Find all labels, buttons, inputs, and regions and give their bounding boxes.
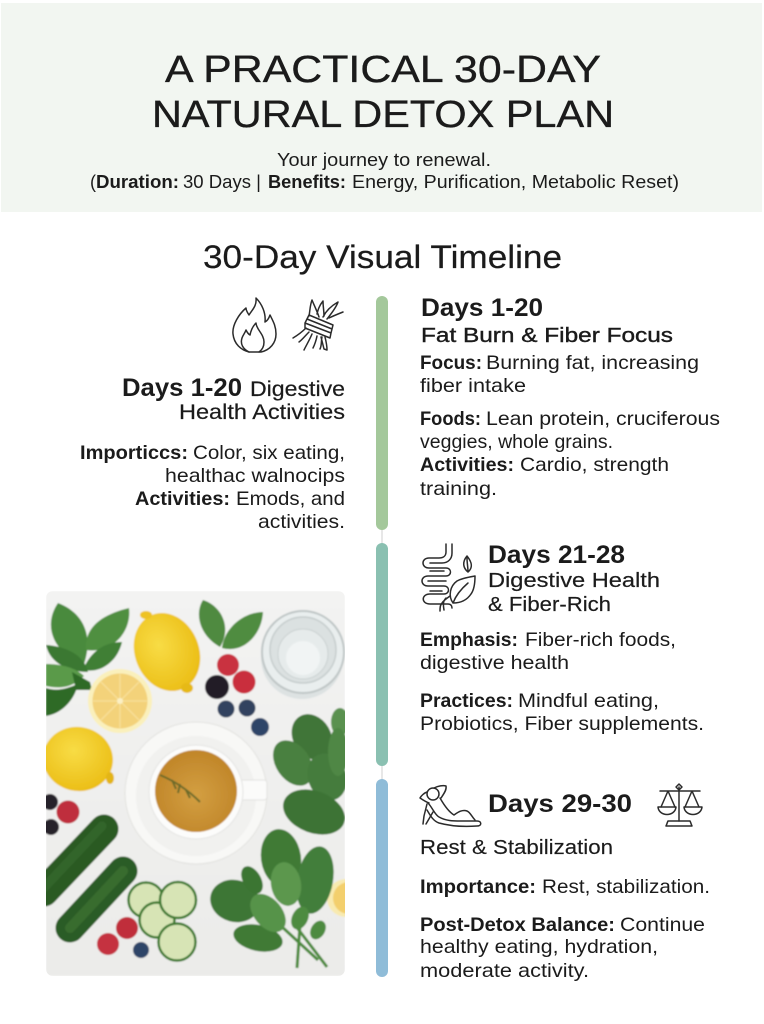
subtitle: 30 Days | xyxy=(183,172,261,192)
body days 21-28: Practices: xyxy=(420,690,513,712)
panel: right days 1-20 xyxy=(420,294,720,500)
tea xyxy=(155,750,237,832)
heading days 21-28 xyxy=(488,541,660,616)
left body text: activities. xyxy=(258,511,345,533)
subtitle: Duration: xyxy=(96,172,179,192)
icon: flame xyxy=(233,298,276,352)
left body text: Color, six eating, xyxy=(193,442,345,464)
body days 21-28: Fiber-rich foods, xyxy=(525,629,676,651)
body days 1-20: Activities: xyxy=(420,454,514,476)
body days 29-30: moderate activity. xyxy=(420,960,589,982)
body days 29-30: Importance: xyxy=(420,876,536,898)
subheading rest and stabilization: Rest & Stabilization xyxy=(420,836,613,859)
left body text: Emods, and xyxy=(236,488,345,510)
heading days 21-28: Digestive Health xyxy=(488,569,660,592)
body days 29-30: Rest, stabilization. xyxy=(542,876,710,898)
heading days 1-20: Fat Burn & Fiber Focus xyxy=(421,324,673,347)
berries lower xyxy=(56,800,80,824)
lemon whole top xyxy=(132,612,202,692)
body days 21-28 xyxy=(420,629,704,735)
icon: balance scales xyxy=(658,784,702,826)
body days 21-28: Probiotics, Fiber supplements. xyxy=(420,713,704,735)
left heading: Health Activities xyxy=(179,401,345,424)
subtitle: Energy, Purification, Metabolic Reset) xyxy=(352,172,679,192)
body days 1-20: Burning fat, increasing xyxy=(486,352,699,374)
subtitle: Benefits: xyxy=(268,172,346,192)
left body text: Activities: xyxy=(135,488,230,510)
basil leaves xyxy=(46,603,129,716)
cucumbers xyxy=(40,826,123,928)
small mint leaves xyxy=(199,600,225,647)
subtitle xyxy=(90,150,679,192)
body days 21-28: Mindful eating, xyxy=(518,690,659,712)
left body text: healthac walnocips xyxy=(165,465,345,487)
spinach upper right xyxy=(272,707,345,836)
left heading: Days 1-20 xyxy=(122,374,242,402)
body days 1-20: Lean protein, cruciferous xyxy=(486,408,720,430)
body days 1-20: Focus: xyxy=(420,352,482,374)
header band xyxy=(1,3,762,212)
body days 1-20: Cardio, strength xyxy=(520,454,669,476)
herb sprig xyxy=(160,775,200,802)
cup xyxy=(149,745,243,839)
body days 21-28: digestive health xyxy=(420,652,569,674)
left body text: Importiccs: xyxy=(80,442,188,464)
timeline xyxy=(376,296,388,977)
body days 29-30 xyxy=(420,876,710,982)
cucumber slices xyxy=(128,882,196,960)
berries top xyxy=(217,654,239,676)
left body text xyxy=(80,442,345,533)
body days 1-20 xyxy=(420,352,720,500)
body days 29-30: healthy eating, hydration, xyxy=(420,936,658,958)
heading days 29-30: Days 29-30 xyxy=(488,790,632,818)
heading days 1-20: Days 1-20 xyxy=(421,294,543,322)
title: NATURAL DETOX PLAN xyxy=(152,94,614,136)
section heading: 30-Day Visual Timeline xyxy=(203,239,562,275)
title: A PRACTICAL 30-DAY xyxy=(165,49,601,91)
body days 1-20: fiber intake xyxy=(420,375,526,397)
saucer xyxy=(127,754,264,862)
subtitle: Your journey to renewal. xyxy=(277,150,491,170)
title xyxy=(152,49,614,136)
body days 1-20: Foods: xyxy=(420,408,481,430)
body days 29-30: Post-Detox Balance: xyxy=(420,914,615,936)
body days 1-20: training. xyxy=(420,478,497,500)
lemon half xyxy=(88,669,152,733)
heading days 21-28: & Fiber-Rich xyxy=(488,593,611,616)
phase bar: days 1-20 xyxy=(376,296,388,530)
photo: detox foods flat lay xyxy=(38,591,365,976)
panel: right days 21-28 xyxy=(420,541,704,735)
icon: fiber bundle xyxy=(293,300,343,350)
lemon whole left xyxy=(46,726,114,792)
lemon slice right xyxy=(326,878,345,918)
left heading xyxy=(122,374,345,424)
icon: person resting xyxy=(420,786,481,826)
spinach bunch xyxy=(205,826,339,968)
body days 1-20: veggies, whole grains. xyxy=(420,431,613,453)
phase bar: days 21-28 xyxy=(376,543,388,766)
phase bar: days 29-30 xyxy=(376,779,388,977)
panel: left text days 1-20 xyxy=(80,374,345,533)
subtitle: ( xyxy=(90,172,96,192)
body days 21-28: Emphasis: xyxy=(420,629,518,651)
icon: intestine and leaf xyxy=(422,544,475,611)
left heading: Digestive xyxy=(250,378,345,401)
heading days 1-20 xyxy=(421,294,673,347)
cup handle xyxy=(243,780,266,800)
panel: right days 29-30 xyxy=(420,784,710,982)
glass of water xyxy=(261,661,340,699)
heading days 21-28: Days 21-28 xyxy=(488,541,625,569)
body days 29-30: Continue xyxy=(620,914,705,936)
